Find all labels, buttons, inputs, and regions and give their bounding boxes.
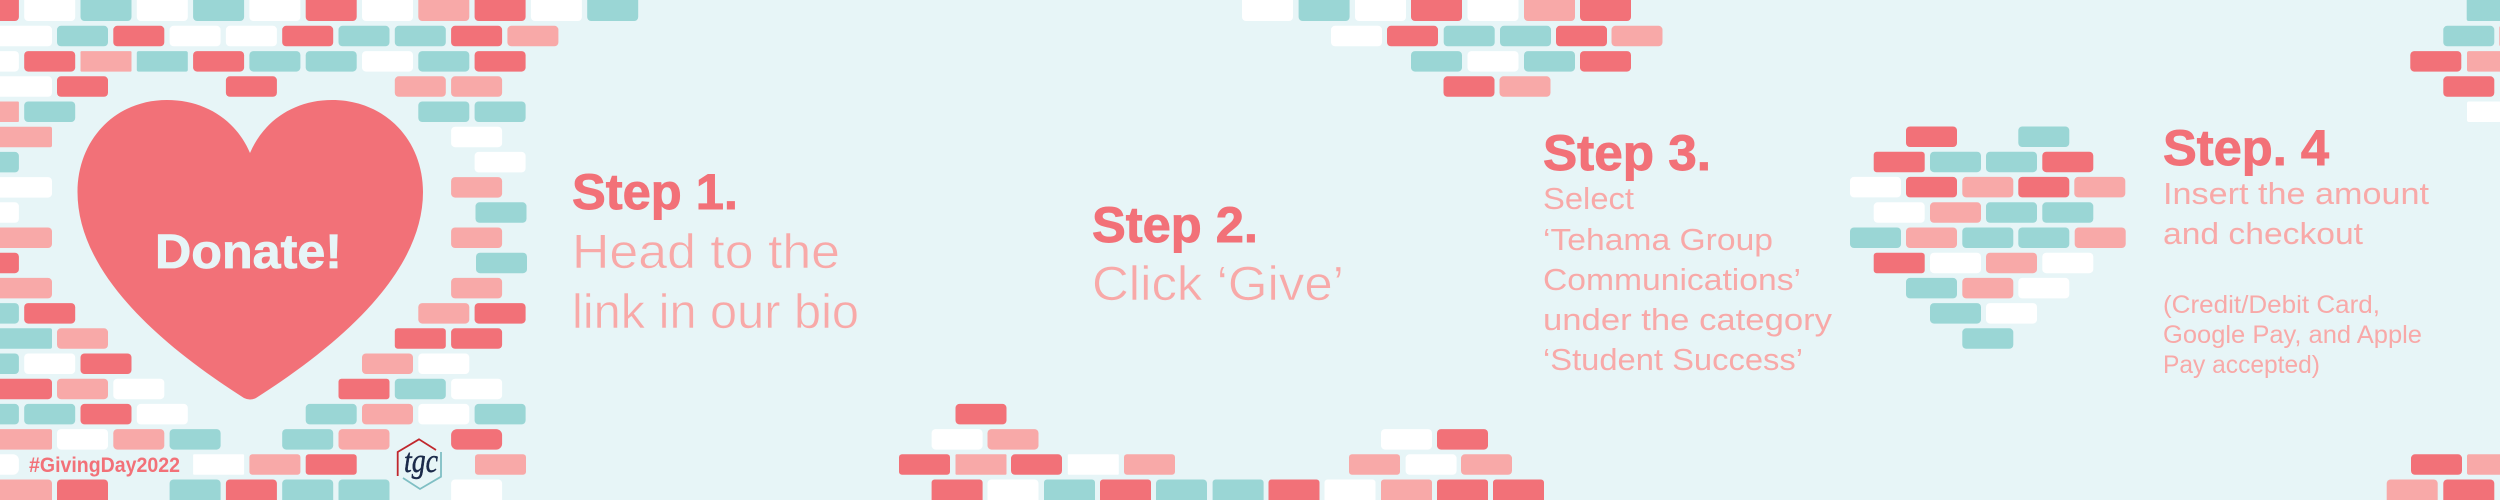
step 4: Pay accepted) xyxy=(2163,351,2320,379)
step 4: Step. 4 xyxy=(2163,120,2329,176)
step 2: Click ‘Give’ xyxy=(1092,258,1344,311)
brick wall: bottom right cluster xyxy=(2387,454,2500,500)
heart shape xyxy=(78,100,423,400)
brick heart xyxy=(1850,126,2126,349)
step 4: Google Pay, and Apple xyxy=(2163,321,2422,349)
step 3: Step 3. xyxy=(1543,125,1711,181)
step 2 xyxy=(1092,197,1344,311)
step 4: and checkout xyxy=(2163,216,2363,251)
step 1 xyxy=(572,164,859,339)
step 1: Step 1. xyxy=(572,164,738,220)
brick wall: bottom middle cluster xyxy=(899,404,1544,500)
step 3: Select xyxy=(1543,181,1634,216)
brick wall: top middle cluster xyxy=(1242,0,1662,97)
step 3: Communications’ xyxy=(1543,262,1801,297)
hashtag: #GivingDay2022 xyxy=(29,454,180,477)
logo: tgc hexagon xyxy=(398,439,441,489)
brick wall: top right cluster xyxy=(2410,0,2500,122)
logo: tgc hexagon: tgc xyxy=(404,443,438,480)
step 3 xyxy=(1543,125,1833,377)
step 3: under the category xyxy=(1543,302,1833,337)
step 3: ‘Tehama Group xyxy=(1543,222,1773,257)
step 4: Insert the amount xyxy=(2163,176,2429,211)
step 2: Step 2. xyxy=(1092,197,1258,253)
step 1: Head to the xyxy=(572,226,840,279)
step 1: link in our bio xyxy=(572,286,859,339)
brick wall: left cluster around heart xyxy=(0,0,638,500)
heart label: Donate!: Donate! xyxy=(155,226,342,279)
step 4: (Credit/Debit Card, xyxy=(2163,291,2380,319)
step 3: ‘Student Success’ xyxy=(1543,342,1803,377)
step 4 xyxy=(2163,120,2429,379)
